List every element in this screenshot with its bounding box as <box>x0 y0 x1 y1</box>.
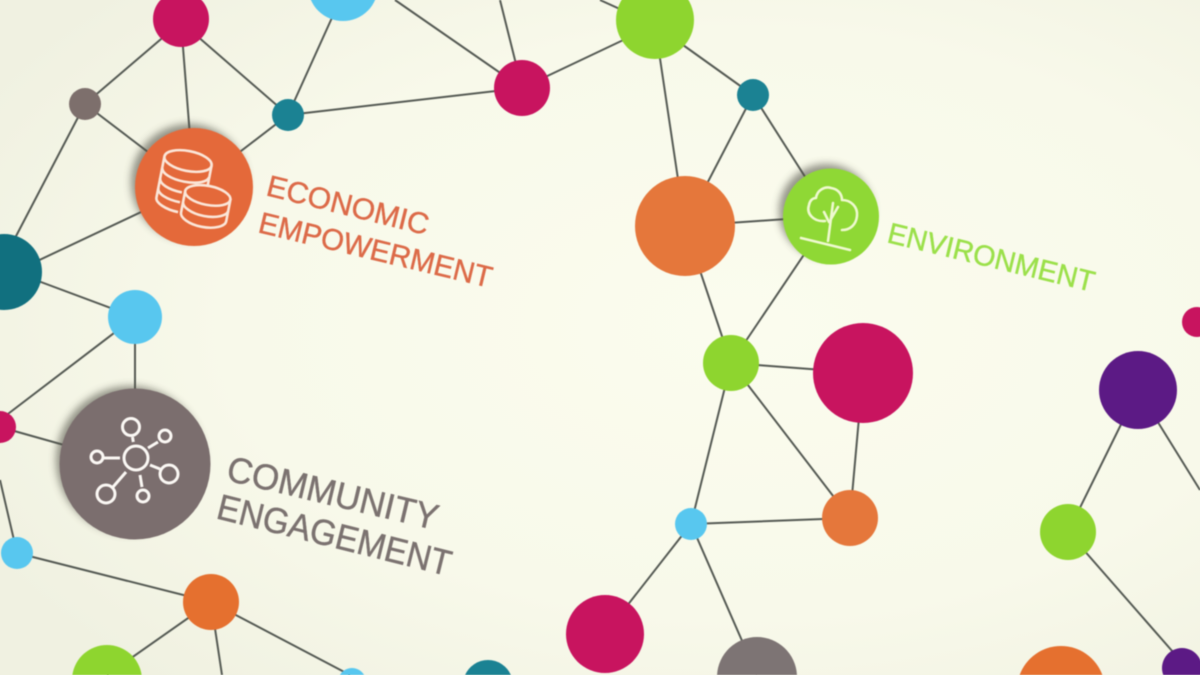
icon: community engagement network <box>60 388 210 540</box>
heading: community engagement: ENGAGEMENT <box>213 486 456 584</box>
heading: economic empowerment: ECONOMIC <box>263 170 432 242</box>
heading: community engagement <box>213 448 456 584</box>
heading: community engagement: COMMUNITY <box>223 448 443 538</box>
heading: environment: ENVIRONMENT <box>884 218 1098 299</box>
icon: environment tree <box>783 168 879 264</box>
heading: economic empowerment <box>255 170 495 295</box>
heading: economic empowerment: EMPOWERMENT <box>255 207 495 295</box>
shadow: highlighted nodes <box>56 124 873 534</box>
icon: economic empowerment coins <box>135 128 253 246</box>
